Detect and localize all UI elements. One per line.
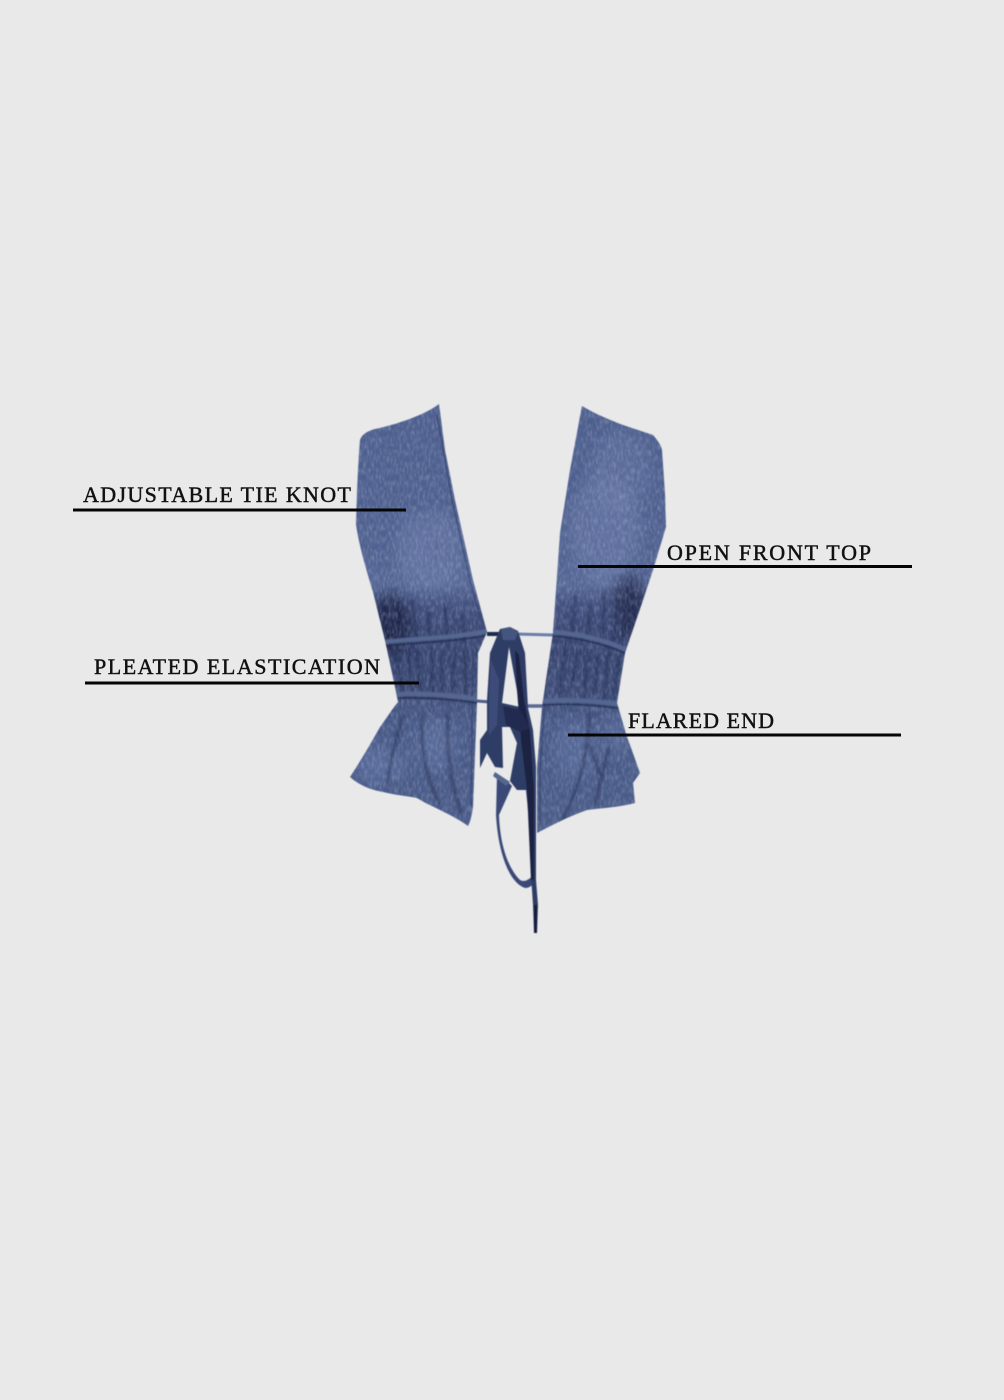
leader line [568,734,901,736]
label: OPEN FRONT TOP [667,540,871,565]
elastic gathers [385,631,627,708]
garment: denim tie-front vest [340,400,680,933]
leader line [578,565,912,568]
leader line [85,682,419,684]
callout: adjustable tie knot [73,482,406,512]
tie cords crossing the gap [477,634,553,706]
pleats [388,592,630,820]
callout: flared end [568,708,901,736]
tie straps and bow [480,627,538,933]
label: PLEATED ELASTICATION [94,654,380,679]
denim panels [340,400,680,840]
callout: pleated elastication [85,654,419,684]
neckline seam [437,415,580,825]
leader line [73,508,406,512]
label: FLARED END [628,708,774,733]
callout: open front top [578,540,912,568]
label: ADJUSTABLE TIE KNOT [83,482,352,507]
